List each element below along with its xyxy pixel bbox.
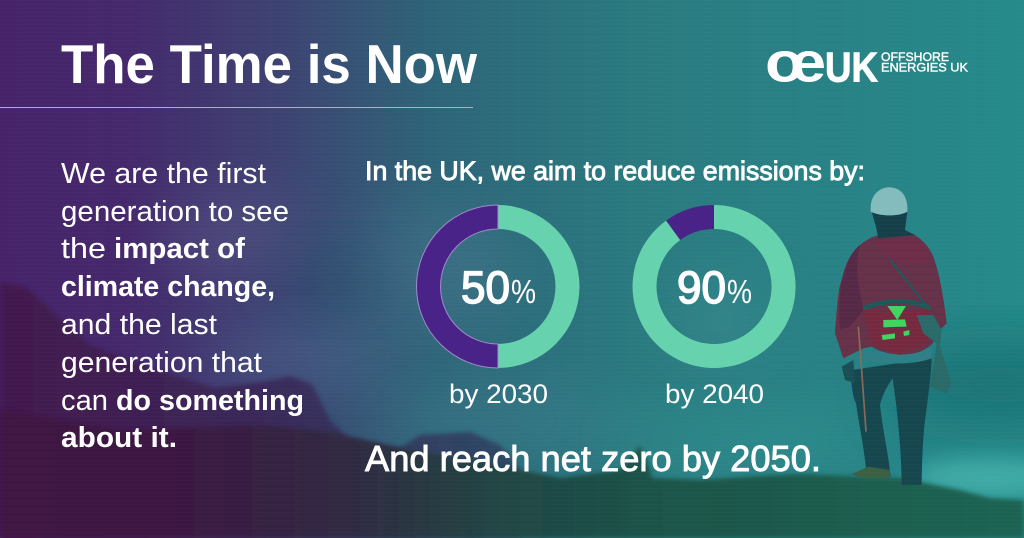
left text block: the — [61, 233, 106, 265]
harness belt — [863, 301, 930, 308]
donut value: % — [727, 273, 752, 310]
left text block: about it. — [61, 422, 177, 454]
left text block: We are the first — [61, 158, 266, 190]
donut value: % — [511, 273, 536, 310]
climber neck — [872, 212, 915, 238]
left text block: generation to see — [61, 196, 289, 228]
logo: OEUK Offshore Energies UK — [765, 30, 968, 94]
left text block — [61, 158, 304, 454]
background: clouds — [160, 195, 1024, 498]
harness green gear — [882, 306, 909, 340]
donut segment: remaining 10% — [666, 205, 714, 240]
hanging rope coil — [917, 315, 952, 393]
image: climber seen from behind — [835, 187, 952, 485]
climber sleeve fold — [839, 245, 863, 330]
dangling ice axe — [858, 327, 866, 432]
logo wordmark line 2: ENERGIES UK — [881, 60, 968, 74]
left text block: generation that — [61, 347, 262, 379]
donut value: 90 — [677, 262, 726, 313]
climber helmet — [871, 187, 907, 215]
donut segment: reduced 90% — [633, 205, 796, 368]
climber jacket — [835, 235, 947, 358]
net zero statement: And reach net zero by 2050. — [365, 438, 821, 479]
title: The Time is Now — [61, 33, 477, 95]
subheading: In the UK, we aim to reduce emissions by: — [365, 156, 865, 186]
climber left hand — [842, 360, 855, 383]
climber boots — [852, 467, 890, 478]
climber hood fold — [872, 238, 929, 265]
background: grass foreground — [0, 410, 1024, 538]
left text block: and the last — [61, 309, 217, 341]
climber legs — [851, 358, 932, 485]
left text block: do something — [116, 385, 304, 417]
donut chart: 50% by 2030 — [416, 205, 580, 409]
climber waist — [863, 348, 932, 364]
donut chart: 90% by 2040 — [633, 205, 796, 409]
donut segment: reduced 50% — [498, 205, 580, 368]
donut segment: remaining 50% — [416, 205, 498, 368]
donut label: by 2040 — [665, 379, 764, 409]
shoulder strap — [890, 260, 930, 310]
donut label: by 2030 — [449, 379, 548, 409]
left text block: can — [61, 385, 108, 417]
logo mark ligature: œ — [765, 30, 826, 94]
background: rocky hills — [0, 282, 520, 538]
left text block: impact of — [114, 233, 245, 265]
logo wordmark line 1: OFFSHORE — [881, 50, 949, 64]
left text block: climate change, — [61, 271, 275, 303]
logo mark letters: UK — [825, 44, 878, 90]
harness pouch — [863, 310, 930, 355]
donut value: 50 — [461, 262, 510, 313]
title divider — [0, 107, 473, 108]
